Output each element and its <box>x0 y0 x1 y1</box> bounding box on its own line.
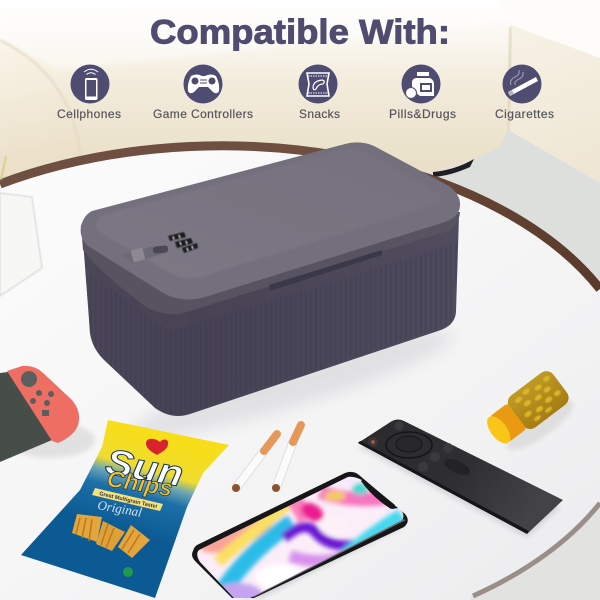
item: pills and drugs <box>389 64 456 121</box>
finger slot <box>269 250 382 291</box>
compatibility icon row <box>57 64 554 121</box>
icon: pill bottle <box>402 64 440 104</box>
cigarettes <box>232 425 301 492</box>
combination lock dials <box>168 232 198 253</box>
label: snacks: Snacks <box>299 107 340 121</box>
product: lockable storage box <box>81 142 460 456</box>
wooden rim <box>0 146 600 289</box>
item: cellphones <box>57 64 121 121</box>
icon: game controller <box>184 64 222 104</box>
glass object on table <box>0 156 42 296</box>
snack bag: Sun Chips: Chips <box>105 465 174 501</box>
icon: snack bag <box>298 64 338 104</box>
lid skirt <box>81 212 460 314</box>
lid recessed panel <box>96 149 441 278</box>
lid top <box>81 142 460 299</box>
pill bottle <box>480 368 580 458</box>
label: pills and drugs: Pills&Drugs <box>389 107 456 121</box>
snack bag: Sun Chips <box>21 420 229 598</box>
round table with wooden rim <box>0 146 600 600</box>
smartphone <box>190 470 410 600</box>
cigarette 2 <box>272 425 301 492</box>
slide latch <box>120 245 168 262</box>
label: cigarettes: Cigarettes <box>495 107 554 121</box>
icon: cigarette <box>502 64 542 104</box>
phone notch <box>361 479 395 509</box>
label: game controllers: Game Controllers <box>153 107 253 121</box>
item: cigarettes <box>495 64 554 121</box>
label: cellphones: Cellphones <box>57 107 121 121</box>
box body with vertical ribs <box>83 215 459 416</box>
icon: cellphone <box>70 64 110 104</box>
grey lower rim <box>473 503 600 596</box>
TV remote <box>358 420 563 538</box>
snack bag: Sun Chips: Great Multigrain Taste! <box>99 491 158 510</box>
title: Compatible With: <box>150 14 450 52</box>
snack bag: Sun Chips: Original <box>96 497 144 520</box>
game controller (red and dark) <box>0 366 95 462</box>
item: snacks <box>298 64 340 121</box>
item: game controllers <box>153 64 253 121</box>
phone screen artwork <box>197 476 404 598</box>
snack bag: Sun Chips: Sun <box>103 441 187 494</box>
cigarette 1 <box>232 434 277 492</box>
